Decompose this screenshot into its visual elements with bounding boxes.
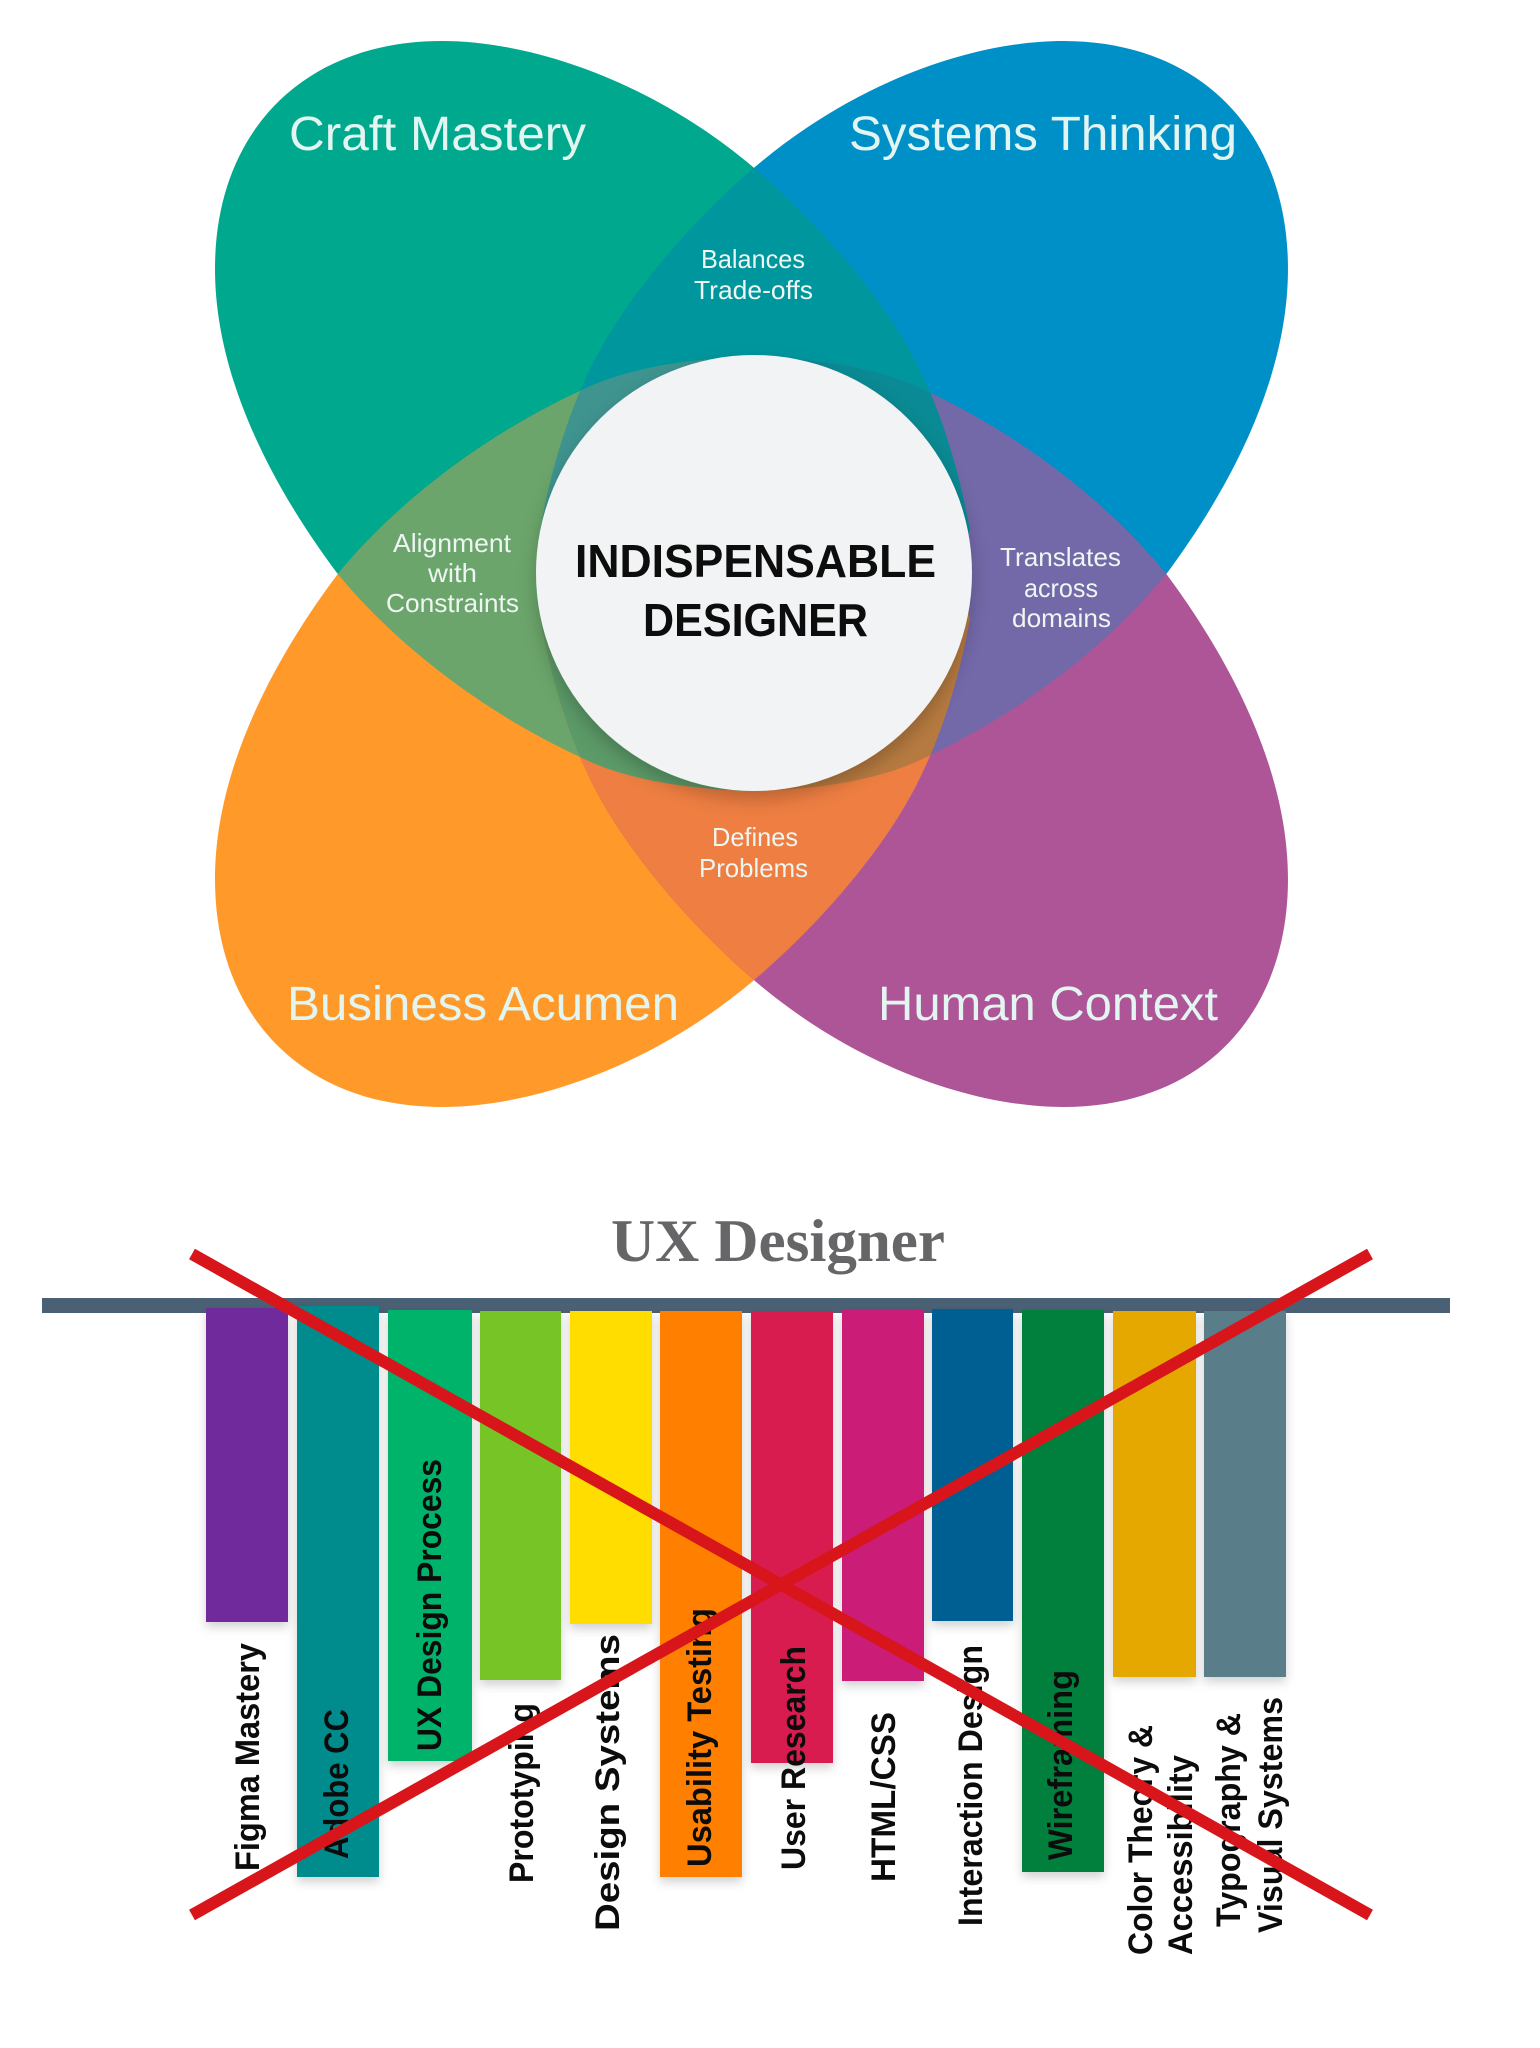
bar labels <box>229 1459 1290 1955</box>
overlap: alignment with constraints <box>338 359 712 757</box>
petal: craft mastery <box>215 41 754 574</box>
triple overlap: upper right <box>796 359 970 534</box>
center heading: DESIGNER <box>643 594 868 646</box>
label: adobe cc: Adobe CC <box>318 1709 356 1859</box>
label: color theory and: Color Theory & <box>1122 1725 1160 1955</box>
overlap: balances trade-offs <box>580 168 930 393</box>
label: human context: Human Context <box>878 978 1218 1031</box>
bar: typography <box>1204 1311 1286 1677</box>
bar: design systems <box>570 1311 652 1624</box>
bar: usability testing <box>660 1311 742 1877</box>
bar: ux design process <box>388 1310 472 1761</box>
venn diagram <box>200 30 1308 1118</box>
petal: business acumen <box>215 390 754 1107</box>
label: user research: User Research <box>775 1646 813 1870</box>
label: balances trade-offs <box>694 244 813 305</box>
label: alignment with constraints: Alignment <box>393 528 512 558</box>
label: balances trade-offs: Trade-offs <box>694 275 813 305</box>
triple overlap: lower right <box>762 614 970 791</box>
label: systems thinking: Systems Thinking <box>849 108 1237 161</box>
hanging skill bars <box>206 1306 1286 1877</box>
label: business acumen: Business Acumen <box>287 978 679 1031</box>
label: alignment with constraints <box>386 528 519 618</box>
label: craft mastery: Craft Mastery <box>289 108 586 161</box>
label: typography and: Typography & <box>1210 1713 1248 1927</box>
bar: adobe cc <box>297 1306 379 1877</box>
triple overlap: upper left <box>540 360 710 530</box>
bar: color theory <box>1113 1311 1196 1677</box>
label: defines problems: Defines <box>712 822 798 852</box>
bar: interaction design <box>932 1309 1013 1621</box>
heading: ux designer: UX Designer <box>611 1208 945 1274</box>
label: alignment with constraints: with <box>427 558 477 588</box>
bar: figma mastery <box>206 1308 288 1622</box>
label: defines problems: Problems <box>699 853 808 883</box>
overlap: translates across domains <box>796 359 1166 755</box>
petal: systems thinking <box>580 41 1288 574</box>
label: translates across domains: domains <box>1012 603 1111 633</box>
label: html/css: HTML/CSS <box>865 1712 903 1882</box>
label: translates across domains: Translates <box>1000 542 1121 572</box>
red cross-out <box>192 1254 1370 1915</box>
label: interaction design: Interaction Design <box>952 1645 990 1926</box>
petal: human context <box>580 392 1288 1107</box>
rail <box>42 1298 1450 1313</box>
triple overlap: lower left <box>540 617 746 791</box>
label: wireframing: Wireframing <box>1042 1670 1080 1860</box>
label: usability testing: Usability Testing <box>681 1608 719 1867</box>
label: translates across domains: across <box>1024 573 1098 603</box>
label: ux design process: UX Design Process <box>411 1459 449 1751</box>
label: accessibility: Accessibility <box>1162 1755 1200 1955</box>
center heading <box>575 535 936 646</box>
bar: user research <box>751 1311 833 1763</box>
label: visual systems: Visual Systems <box>1252 1697 1290 1933</box>
bar: prototyping <box>480 1311 561 1680</box>
center heading: INDISPENSABLE <box>575 535 936 587</box>
bar: html/css <box>842 1310 924 1681</box>
center circle <box>536 355 972 791</box>
bar: wireframing <box>1022 1310 1104 1872</box>
label: figma mastery: Figma Mastery <box>229 1643 267 1871</box>
label: balances trade-offs: Balances <box>701 244 805 274</box>
overlap: defines problems <box>540 614 970 980</box>
label: design systems: Design Systems <box>589 1634 627 1931</box>
label: translates across domains <box>1000 542 1121 633</box>
label: alignment with constraints: Constraints <box>386 588 519 618</box>
label: defines problems <box>699 822 808 883</box>
label: prototyping: Prototyping <box>503 1703 541 1883</box>
